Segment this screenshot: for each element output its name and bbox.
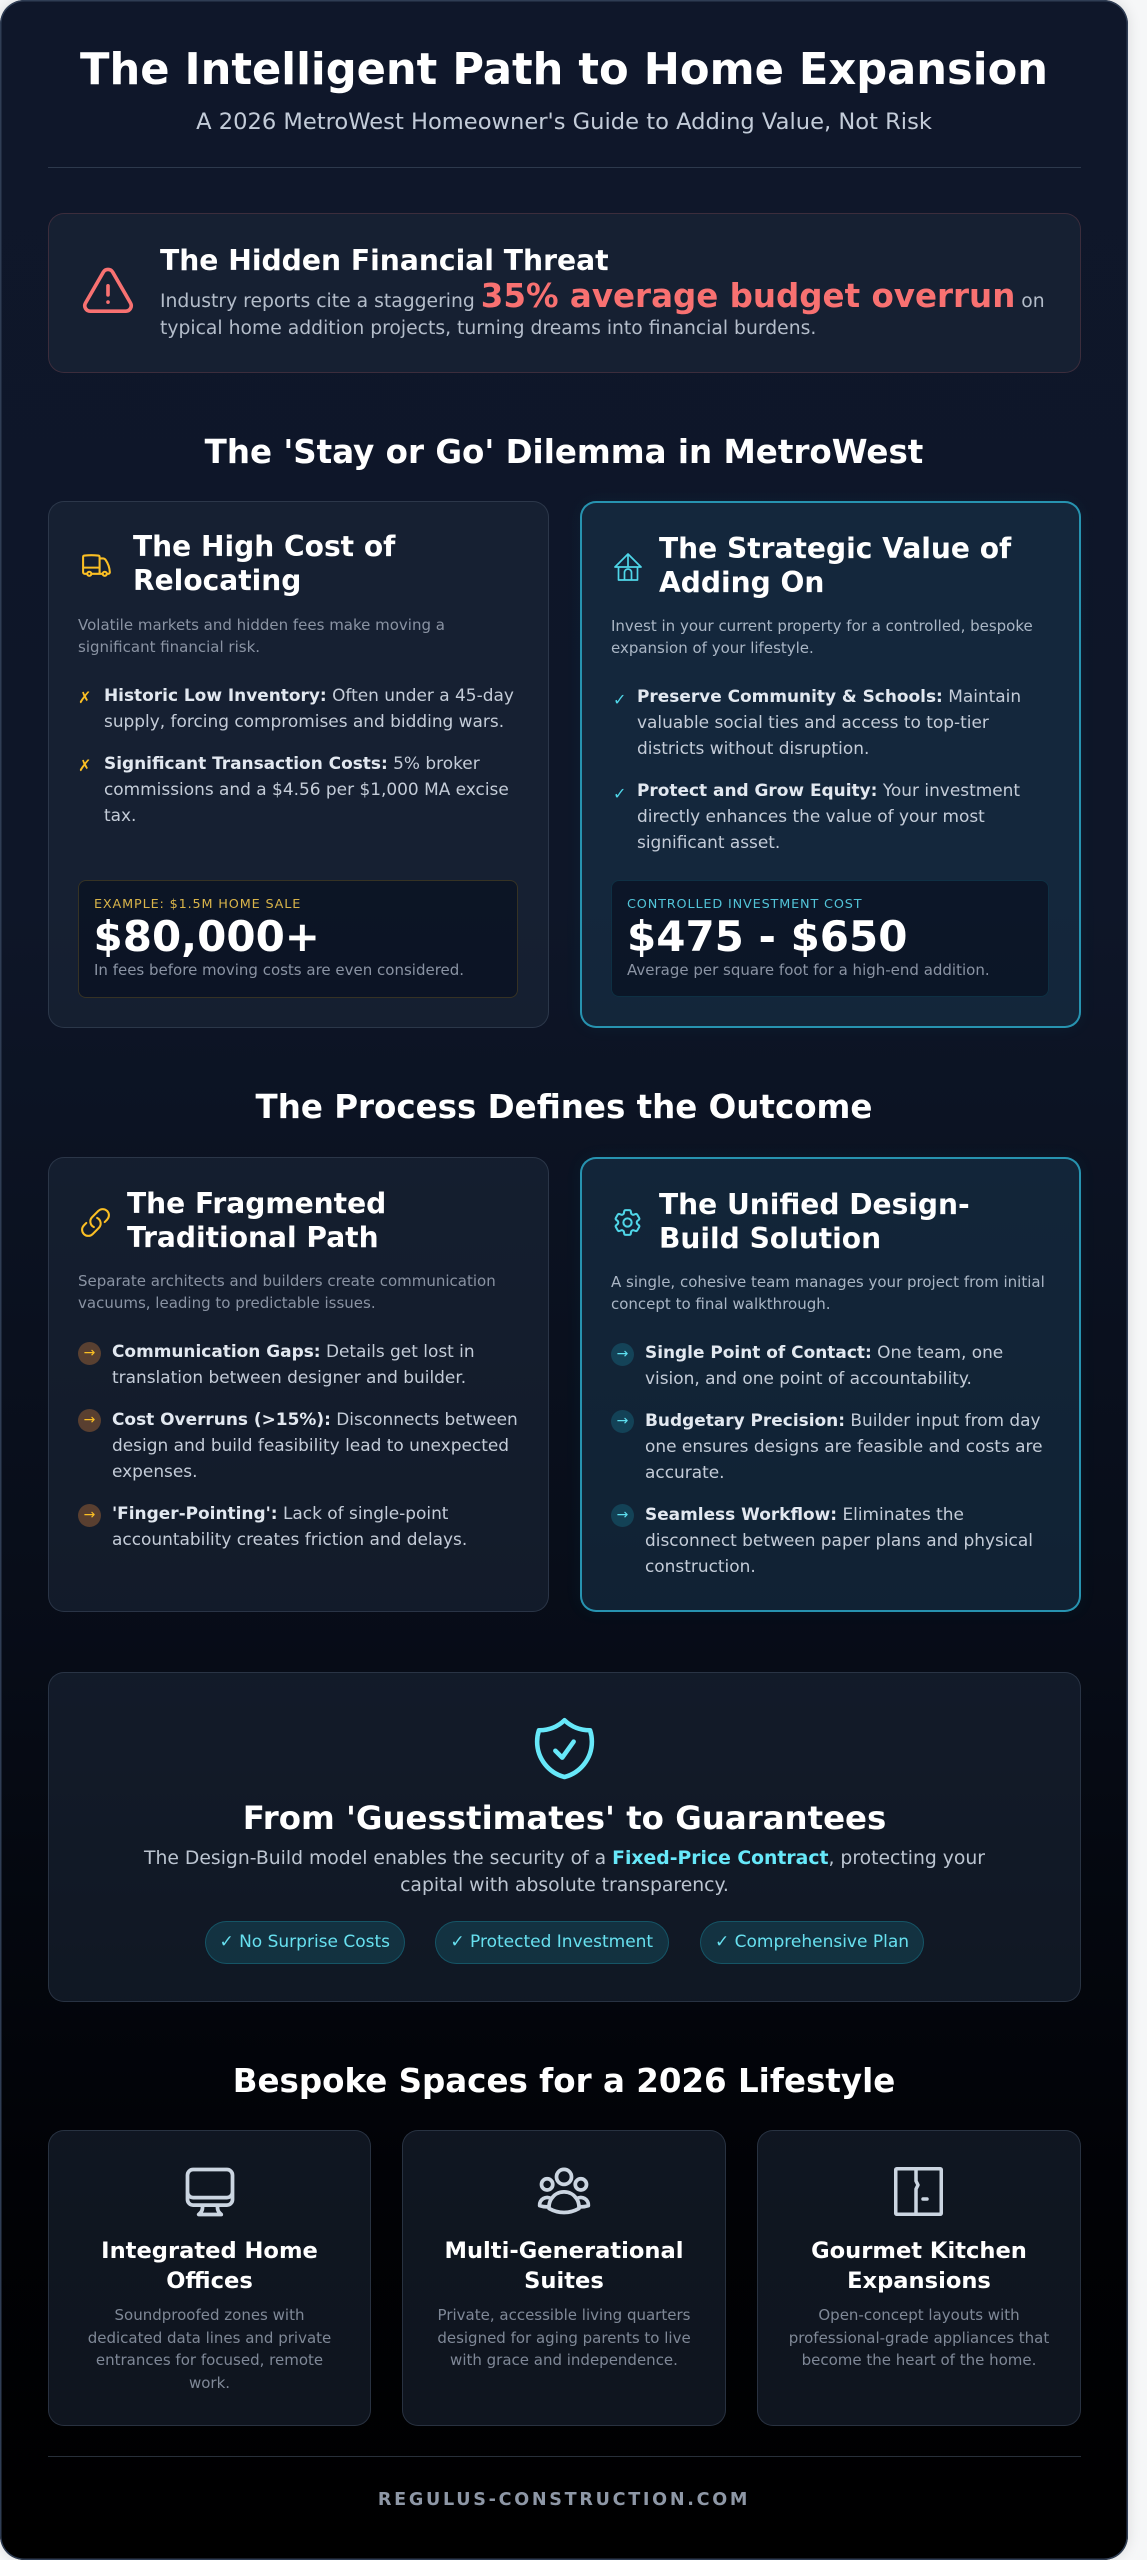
space title (811, 2238, 1027, 2294)
list item: seamless workflow (645, 1504, 1033, 1576)
list item: equity: significant asset. (637, 832, 780, 852)
list item: seamless workflow: disconnect between paper plans and physical (645, 1530, 1033, 1550)
panel: guarantees (48, 1672, 1081, 2002)
icon: arrow bullet (611, 1504, 634, 1527)
card heading: The Fragmented (127, 1187, 386, 1220)
icon: gear (614, 1209, 640, 1236)
panel: hidden financial threat (48, 213, 1081, 373)
list item: equity: Protect and Grow Equity: Your investment (637, 780, 1020, 800)
heading: stay or go: The 'Stay or Go' Dilemma in MetroWest (205, 432, 923, 470)
icon: people group (538, 2168, 590, 2214)
icon: arrow bullet: → (617, 1413, 628, 1429)
panel: fragmented traditional path (48, 1157, 549, 1612)
list item: communication gaps: translation between designer and builder. (112, 1367, 466, 1387)
list item: single point of contact: vision, and one point of accountability. (645, 1368, 972, 1388)
space description: Private, accessible living quarters (438, 2306, 690, 2324)
title: The Intelligent Path to Home Expansion (80, 45, 1048, 95)
stat value: $80,000+ (94, 912, 320, 961)
card heading: The Unified Design- (659, 1188, 970, 1221)
card intro: vacuums, leading to predictable issues. (78, 1294, 376, 1312)
icon: arrow bullet: → (84, 1506, 95, 1522)
space description: dedicated data lines and private (88, 2329, 331, 2347)
heading: process: The Process Defines the Outcome (256, 1088, 872, 1126)
space description: with grace and independence. (450, 2351, 678, 2369)
icon: monitor (186, 2168, 234, 2216)
card heading: The High Cost of (133, 530, 395, 563)
card heading: The Strategic Value of (659, 532, 1011, 565)
list item: inventory (104, 685, 514, 731)
space description: become the heart of the home. (802, 2351, 1036, 2369)
card heading (127, 1187, 386, 1254)
space description (88, 2306, 331, 2392)
panel: unified design-build solution (580, 1157, 1081, 1612)
icon: house (614, 553, 642, 581)
pill: comprehensive plan: ✓ Comprehensive Plan (715, 1932, 909, 1952)
card intro (611, 1273, 1045, 1313)
list item: inventory: supply, forcing compromises and bidding wars. (104, 711, 504, 731)
icon: arrow bullet (78, 1408, 101, 1432)
list item: community: districts without disruption. (637, 738, 869, 758)
card intro (611, 617, 1033, 657)
icon: arrow bullet (78, 1342, 101, 1365)
space description: Soundproofed zones with (115, 2306, 304, 2324)
list item: cost overruns: expenses. (112, 1461, 198, 1481)
space title: Offices (166, 2268, 253, 2294)
list item: budgetary precision: Budgetary Precision: Builder input from day (645, 1410, 1041, 1430)
list item: cost overruns (112, 1409, 518, 1481)
card intro: significant financial risk. (78, 638, 260, 656)
space title: Multi-Generational (444, 2238, 684, 2264)
list item: transaction costs: tax. (104, 805, 136, 825)
space title: Expansions (847, 2268, 991, 2294)
space title (444, 2238, 684, 2294)
list item: communication gaps (112, 1341, 475, 1387)
list item: community: Preserve Community & Schools: Maintain (637, 686, 1021, 706)
list item: finger pointing (112, 1503, 467, 1549)
list item: cost overruns: design and build feasibility lead to unexpected (112, 1435, 509, 1455)
marker: ✓ (613, 784, 626, 803)
icon: kitchen cabinet (894, 2167, 943, 2216)
icon: truck (82, 554, 111, 577)
card heading (659, 1188, 970, 1255)
list item: budgetary precision: accurate. (645, 1462, 725, 1482)
pill: no surprise costs: ✓ No Surprise Costs (219, 1932, 390, 1952)
list item: transaction costs: commissions and a $4.56 per $1,000 MA excise (104, 779, 509, 799)
panel: home offices (48, 2130, 371, 2426)
icon: warning triangle (82, 268, 134, 313)
alert text (160, 277, 1045, 339)
heading: bespoke spaces: Bespoke Spaces for a 2026 Lifestyle (233, 2062, 895, 2100)
list item: equity: directly enhances the value of your most (637, 806, 985, 826)
stat box: cost (611, 880, 1049, 996)
subtitle: A 2026 MetroWest Homeowner's Guide to Adding Value, Not Risk (196, 109, 932, 135)
marker: ✓ (613, 690, 626, 709)
list item: budgetary precision (645, 1410, 1043, 1482)
card intro (78, 1272, 496, 1312)
list item: finger pointing: 'Finger-Pointing': Lack of single-point (112, 1503, 448, 1523)
pill: protected investment: ✓ Protected Investment (450, 1932, 653, 1952)
guarantee text: capital with absolute transparency. (400, 1875, 729, 1896)
stat description: Average per square foot for a high-end addition. (627, 960, 990, 978)
icon: arrow bullet: → (617, 1507, 628, 1523)
icon: arrow bullet (78, 1504, 101, 1526)
panel: strategic value of adding on (580, 501, 1081, 1028)
card heading (659, 532, 1012, 599)
card heading: Relocating (133, 564, 301, 597)
panel: high cost of relocating (48, 501, 549, 1028)
icon: arrow bullet: → (84, 1345, 95, 1361)
card heading: Adding On (659, 566, 824, 599)
space description (437, 2306, 691, 2369)
stat label: EXAMPLE: $1.5M HOME SALE (94, 897, 301, 912)
guarantee text (144, 1848, 985, 1896)
marker: ✗ (78, 688, 91, 707)
card heading: Build Solution (659, 1222, 881, 1255)
space description: Open-concept layouts with (818, 2306, 1020, 2324)
space description (789, 2306, 1049, 2369)
list item: cost overruns: Cost Overruns (>15%): Disconnects between (112, 1409, 518, 1429)
pill: protected investment (435, 1921, 668, 1964)
list item: communication gaps: Communication Gaps: Details get lost in (112, 1341, 475, 1361)
icon: broken chain link (81, 1208, 110, 1237)
marker: ✗ (78, 756, 91, 774)
card intro (78, 616, 445, 656)
list item: seamless workflow: Seamless Workflow: Eliminates the (645, 1504, 964, 1524)
card heading (133, 530, 396, 597)
space title: Suites (524, 2268, 604, 2294)
space description: work. (189, 2374, 230, 2392)
card intro: Separate architects and builders create communication (78, 1272, 496, 1290)
list item: seamless workflow: construction. (645, 1556, 756, 1576)
space description: professional-grade appliances that (789, 2329, 1049, 2347)
pill: comprehensive plan (700, 1921, 924, 1964)
guarantee text: The Design-Build model enables the security of a Fixed-Price Contract, protecting your (144, 1848, 985, 1869)
list item: budgetary precision: one ensures designs are feasible and costs are (645, 1436, 1043, 1456)
icon: shield check (534, 1718, 594, 1780)
card intro: Volatile markets and hidden fees make moving a (78, 616, 445, 634)
space title (101, 2238, 318, 2294)
alert text: typical home addition projects, turning dreams into financial burdens. (160, 318, 816, 339)
icon: arrow bullet: → (617, 1346, 628, 1362)
icon: arrow bullet (611, 1410, 634, 1433)
list item: finger pointing: accountability creates friction and delays. (112, 1529, 467, 1549)
space title: Gourmet Kitchen (811, 2238, 1027, 2264)
pill: no surprise costs (205, 1921, 404, 1964)
card heading: Traditional Path (127, 1221, 379, 1254)
list item: single point of contact (645, 1342, 1003, 1388)
list item: equity (637, 780, 1020, 852)
stat value: $475 - $650 (627, 912, 907, 960)
stat label: CONTROLLED INVESTMENT COST (627, 896, 862, 912)
list item: transaction costs: Significant Transaction Costs: 5% broker (104, 752, 480, 772)
list item: inventory: Historic Low Inventory: Often under a 45-day (104, 685, 514, 705)
list item: single point of contact: Single Point of Contact: One team, one (645, 1342, 1003, 1362)
alert text: Industry reports cite a staggering 35% average budget overrun on (160, 277, 1045, 315)
stat box: fees (78, 880, 518, 998)
icon: arrow bullet: → (84, 1412, 95, 1428)
card intro: Invest in your current property for a controlled, bespoke (611, 617, 1033, 635)
footer: REGULUS-CONSTRUCTION.COM (378, 2490, 750, 2510)
space description: designed for aging parents to live (437, 2329, 691, 2347)
stat description: In fees before moving costs are even considered. (94, 961, 464, 979)
list item: community (637, 686, 1021, 758)
card intro: A single, cohesive team manages your project from initial (611, 1273, 1045, 1291)
icon: arrow bullet (611, 1342, 634, 1366)
space title: Integrated Home (101, 2238, 318, 2264)
list item: transaction costs (104, 752, 509, 825)
guarantee heading: From 'Guesstimates' to Guarantees (243, 1799, 886, 1837)
panel: gourmet kitchen expansions (757, 2130, 1081, 2426)
alert heading: The Hidden Financial Threat (160, 244, 609, 277)
card intro: expansion of your lifestyle. (611, 639, 814, 657)
card intro: concept to final walkthrough. (611, 1295, 831, 1313)
panel: multi-generational suites (402, 2130, 726, 2426)
list item: community: valuable social ties and access to top-tier (637, 712, 989, 732)
space description: entrances for focused, remote (96, 2351, 323, 2369)
